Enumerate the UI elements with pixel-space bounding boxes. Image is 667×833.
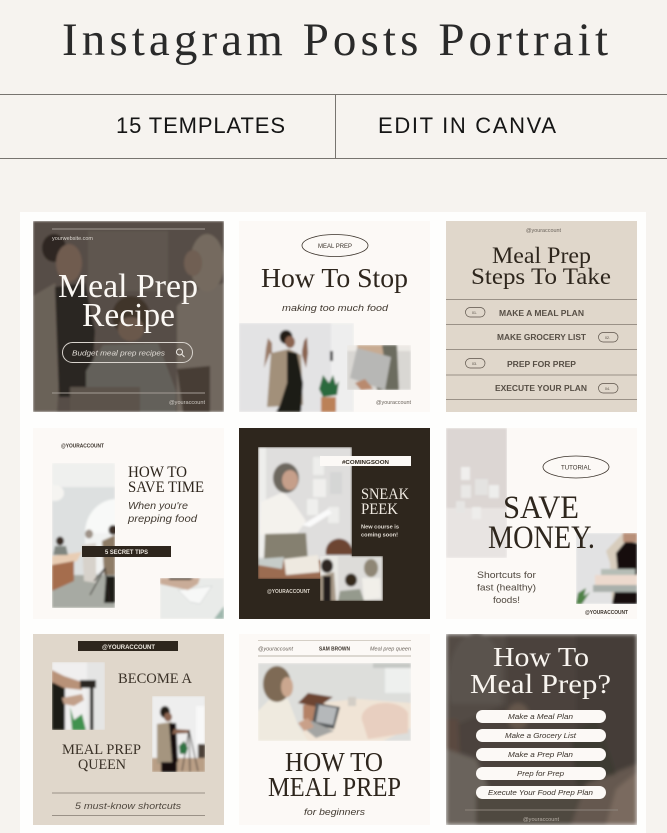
photo: meeting room [52, 464, 115, 608]
photo: holding laptop [347, 345, 411, 390]
photo: woman with tripod [152, 696, 205, 772]
description: coming soon! [361, 532, 398, 538]
search pill [62, 342, 192, 362]
steps list: MAKE GROCERY LIST [497, 333, 586, 342]
steps list: MAKE A MEAL PLAN [499, 309, 584, 318]
banner: account [78, 641, 178, 651]
card heading: Recipe [82, 297, 175, 334]
steps list: PREP FOR PREP [507, 360, 577, 369]
small text: account: @YOURACCOUNT [267, 589, 311, 595]
small text: account: @YOURACCOUNT [61, 444, 105, 450]
card heading: SNEAK [361, 486, 410, 503]
steps list: 04. [605, 387, 610, 391]
badge: tutorial: TUTORIAL [561, 466, 592, 472]
template card: How To Stop [239, 221, 430, 412]
heading lines [62, 742, 141, 773]
photo: woman at laptop [258, 663, 411, 741]
header band: feature labels [0, 94, 667, 158]
template card: How To Meal Prep list [446, 632, 637, 825]
photo: three women [320, 556, 383, 601]
template card: How To Save Time [33, 428, 224, 619]
photo: woman celebrating [239, 323, 354, 412]
banner: account: @YOURACCOUNT [102, 645, 155, 651]
small text: account: @YOURACCOUNT [585, 610, 629, 616]
card heading: HOW TO [285, 747, 383, 777]
subheading: When you're [128, 500, 188, 512]
subheading: prepping food [127, 513, 198, 525]
white panel holding templates [20, 212, 646, 833]
list of pill buttons: Make a Prep Plan [508, 752, 573, 759]
template card: Become A Meal Prep Queen [33, 634, 224, 825]
card heading: MEAL PREP [268, 772, 401, 802]
card heading [58, 268, 198, 334]
banner: 5 secret tips [82, 546, 171, 557]
steps list: EXECUTE YOUR PLAN [495, 384, 587, 393]
card heading: SAVE [503, 490, 579, 526]
card heading: HOW TO [128, 464, 187, 481]
description [361, 524, 399, 538]
card heading: Meal Prep [492, 243, 591, 268]
template card: Meal Prep Recipe [33, 221, 224, 412]
card heading [471, 243, 611, 289]
list of pill buttons: Execute Your Food Prep Plan [488, 790, 593, 797]
search pill: Budget meal prep recipes [72, 348, 165, 358]
badge: tutorial [543, 456, 609, 478]
card heading: Steps To Take [471, 264, 611, 289]
description: fast (healthy) [477, 582, 536, 594]
top bar text [258, 646, 411, 652]
card heading [268, 747, 401, 802]
tag: coming soon: #COMINGSOON [342, 460, 389, 466]
list of pill buttons [476, 710, 606, 799]
title: Instagram Posts Portrait [62, 14, 608, 66]
card heading: PEEK [361, 501, 399, 518]
template card: Meal Prep Steps To Take [446, 221, 637, 412]
photo: wall of pinned notes [446, 428, 507, 558]
template card: Sneak Peek [239, 428, 430, 619]
card heading: How To [493, 642, 589, 672]
card heading [361, 486, 410, 518]
small text: account: @youraccount [526, 228, 561, 234]
tag: coming soon [320, 456, 411, 466]
list of pill buttons: Prep for Prep [517, 771, 564, 778]
card heading [470, 642, 611, 699]
steps list [446, 300, 637, 400]
card heading: SAVE TIME [128, 479, 204, 496]
card heading [488, 490, 595, 556]
subheading [127, 500, 198, 525]
label: 15 templates: 15 TEMPLATES [116, 113, 285, 138]
small text: account: @youraccount [376, 400, 411, 406]
icon: search [176, 349, 184, 357]
photo: adjusting camera [52, 662, 105, 730]
description [477, 570, 536, 606]
badge: meal prep [302, 234, 368, 256]
top bar text: Meal prep queen [370, 646, 411, 652]
photo: holding stack of books [576, 533, 637, 604]
banner: 5 secret tips: 5 SECRET TIPS [105, 550, 148, 556]
small text: account: @youraccount [523, 817, 559, 823]
card heading: How To Stop [261, 263, 408, 293]
description: Shortcuts for [477, 570, 536, 581]
subheading: for beginners [304, 807, 366, 817]
photo: woman reading [258, 447, 352, 579]
subheading: making too much food [282, 303, 389, 314]
description: New course is [361, 524, 399, 530]
top bar text: @youraccount [258, 646, 293, 652]
description: foods! [493, 595, 520, 606]
steps list: 02. [605, 336, 610, 340]
card heading [128, 464, 204, 496]
photo: writing in notebook [160, 578, 224, 619]
steps list: 03. [472, 362, 477, 366]
card heading: MONEY. [488, 520, 595, 556]
small text: website: yourwebsite.com [52, 236, 93, 242]
heading line: BECOME A [118, 671, 192, 687]
small text: account: @youraccount [169, 400, 205, 406]
card heading: Meal Prep [58, 268, 198, 305]
badge: meal prep: MEAL PREP [318, 244, 352, 250]
subheading: 5 must-know shortcuts [75, 801, 182, 811]
list of pill buttons: Make a Grocery List [505, 733, 577, 740]
heading lines: MEAL PREP [62, 742, 141, 758]
heading lines: QUEEN [78, 757, 126, 773]
template card: Save Money [446, 428, 637, 619]
list of pill buttons: Make a Meal Plan [508, 714, 573, 721]
top bar text: SAM BROWN [319, 646, 350, 652]
template card: How To Meal Prep for beginners [239, 634, 430, 825]
steps list: 01. [472, 311, 477, 315]
label: edit in canva: EDIT IN CANVA [378, 113, 556, 138]
card heading: Meal Prep? [470, 669, 611, 699]
